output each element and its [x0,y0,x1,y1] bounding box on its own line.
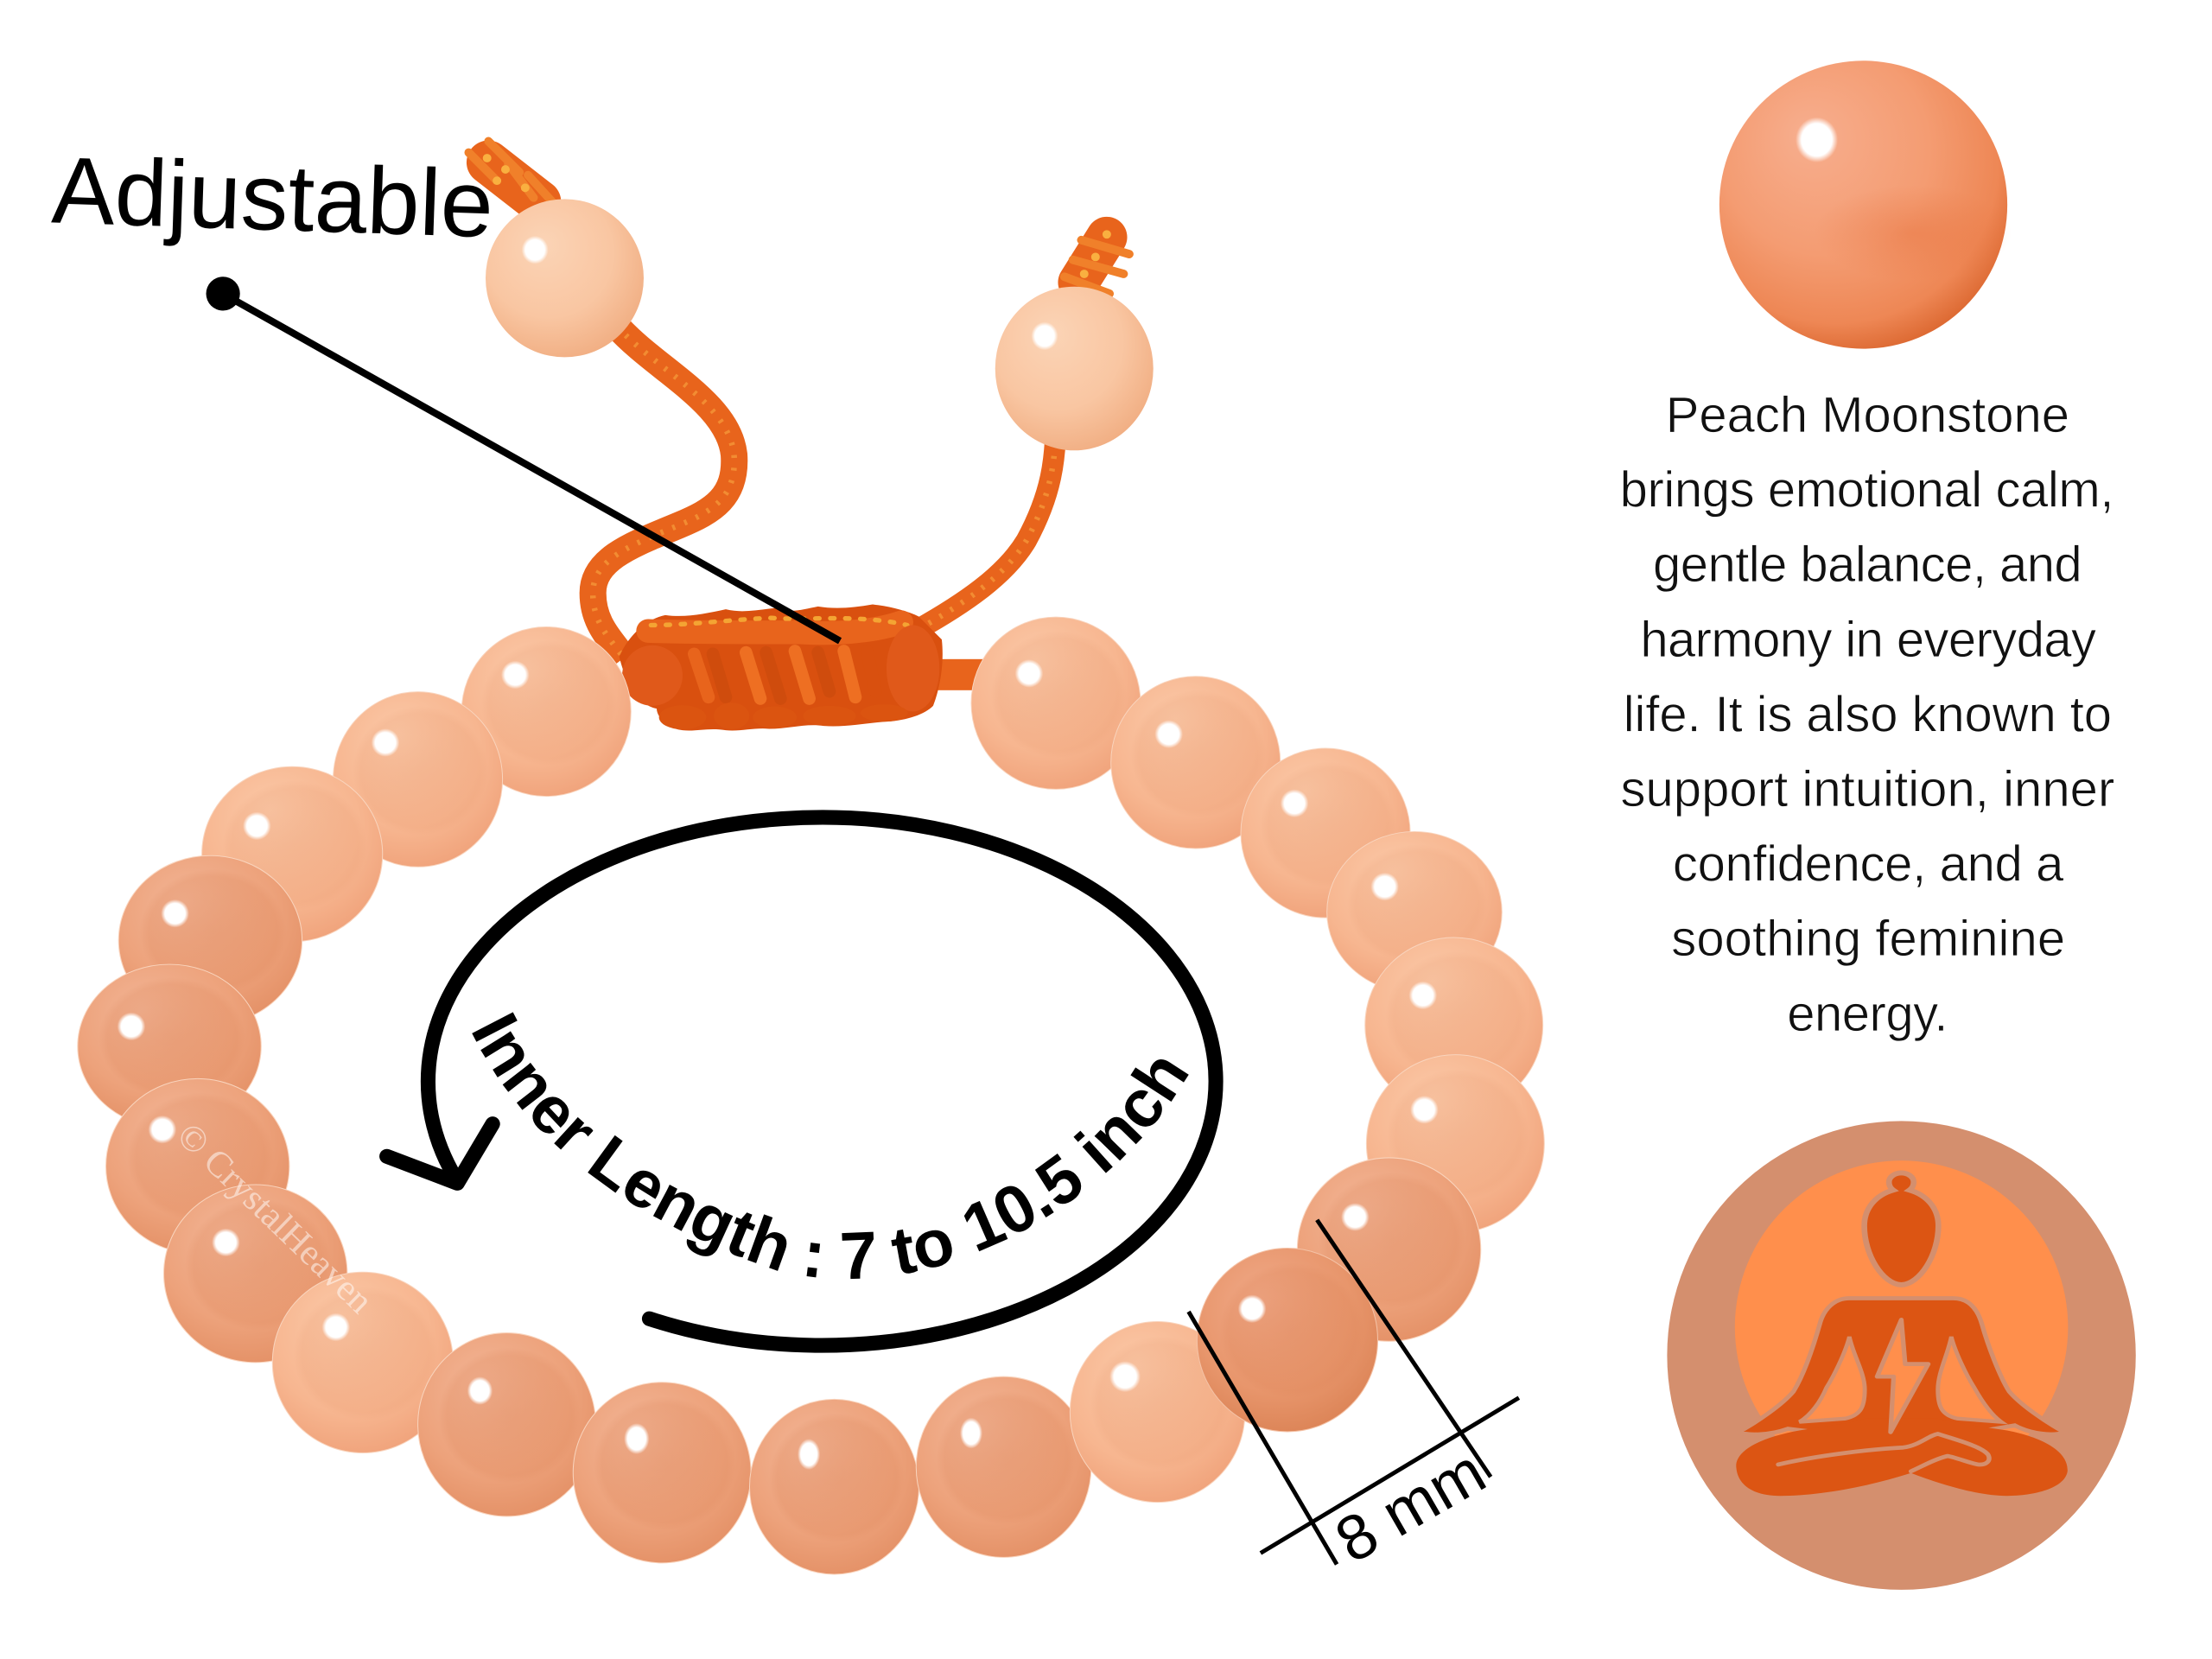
description text: support intuition, inner [1620,761,2114,817]
top right slider bead [995,287,1154,450]
bracelet beads [78,199,1544,1574]
meditation icon [1667,1121,2136,1590]
crossed legs [1736,1419,2068,1496]
top left slider bead [486,199,644,357]
beads left side [78,627,631,1452]
description text: gentle balance, and [1653,537,2082,593]
meditating figure [1736,1173,2068,1496]
description text: Peach Moonstone [1666,387,2069,443]
knot bottom bumps [659,702,908,729]
torso and arms [1738,1299,2064,1437]
beads right side [971,617,1544,1432]
right adjustable cord [918,418,1056,630]
bead size dimension lines [1189,1220,1519,1565]
description text: harmony in everyday [1640,612,2096,668]
label: bead size: 8 mm [1324,1435,1497,1576]
knot top band [648,622,901,633]
icon inner sun [1735,1160,2069,1436]
knot woven wraps [694,651,875,698]
right arm gap [1938,1337,2001,1422]
description text: confidence, and a [1673,836,2064,893]
description text: energy. [1787,986,1948,1042]
peach moonstone sphere [1719,60,2012,349]
left adjustable cord [593,326,734,658]
left arm gap [1799,1337,1865,1422]
description text: life. It is also known to [1624,686,2112,742]
upper right cord knot tip [1065,234,1129,294]
head [1865,1173,1938,1285]
knot body [620,604,943,731]
label: Adjustable: Adjustable [50,137,495,257]
sliding knot [620,604,985,731]
cord to bead [936,659,985,690]
icon background circle [1667,1121,2136,1590]
knot side blobs [887,625,939,711]
upper left cord knot tip [468,141,556,207]
beads bottom [418,1321,1245,1574]
energy bolt [1877,1319,1929,1432]
hand and lap line [1778,1433,1989,1471]
callout pointer [207,276,840,641]
description text: brings emotional calm, [1620,462,2113,518]
circular arrow [387,817,1216,1345]
label: inner length: Inner Length : 7 to 10.5 inch [472,1012,1189,1279]
description text: soothing feminine [1671,911,2065,967]
watermark: © CrystalHeaven [169,1115,381,1321]
